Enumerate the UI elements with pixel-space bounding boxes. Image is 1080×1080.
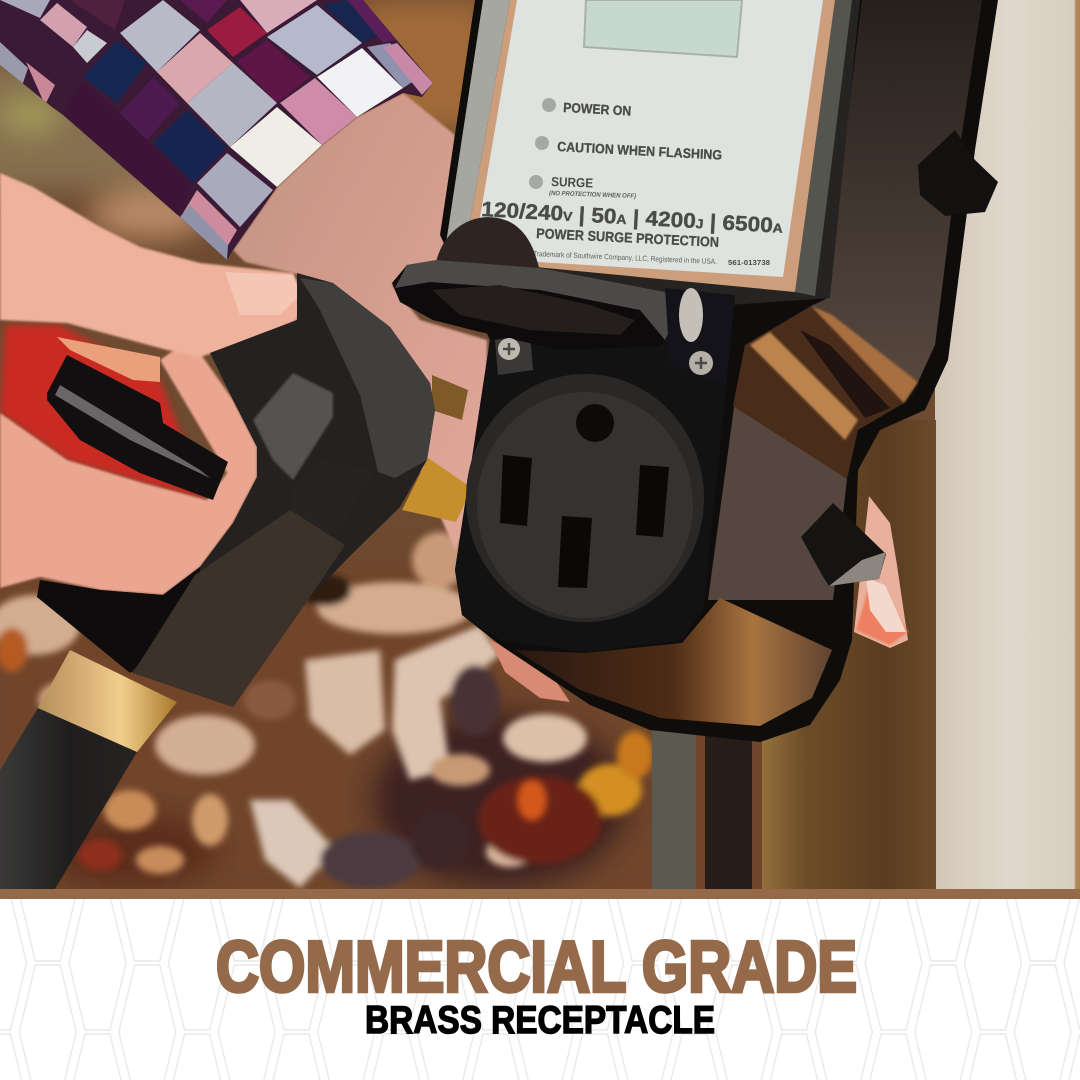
screw: right xyxy=(689,351,713,375)
white label xyxy=(473,0,823,277)
outlet face xyxy=(466,374,704,622)
subheading: BRASS RECEPTACLE xyxy=(365,999,715,1042)
headline: COMMERCIAL GRADE xyxy=(216,928,857,1008)
label: no protection: (NO PROTECTION WHEN OFF) xyxy=(549,190,636,200)
brown divider bar xyxy=(0,889,1080,899)
wooden post xyxy=(762,420,936,889)
forearm xyxy=(233,93,487,550)
screw: hinge xyxy=(679,288,703,342)
inner finger xyxy=(57,337,160,382)
plug handle latch xyxy=(47,355,228,500)
plaid shirt sleeve xyxy=(0,0,440,270)
label: surge: SURGE xyxy=(551,174,594,190)
brass collar xyxy=(38,650,177,752)
white band with honeycomb pattern xyxy=(0,899,1080,1080)
plate screw bracket xyxy=(495,335,533,375)
background: blurred ground and leaves xyxy=(0,0,935,889)
fingertips behind device xyxy=(490,496,908,702)
brass prong: upper xyxy=(432,375,468,420)
slot: bottom xyxy=(558,516,592,588)
clip: upper xyxy=(918,130,998,216)
plug grip xyxy=(253,373,333,480)
surge protector device xyxy=(392,0,998,742)
power cord xyxy=(0,650,177,889)
palm and lower fingers xyxy=(0,348,257,595)
indicator dots xyxy=(529,98,556,189)
title xyxy=(216,928,857,1042)
trademark line: Trademark of Southwire Company, LLC, Registered in the USA. xyxy=(533,249,717,266)
product name line: POWER SURGE PROTECTION xyxy=(536,225,719,250)
slot: right xyxy=(636,465,669,537)
hinge block xyxy=(665,288,735,385)
plug upper grey shell xyxy=(300,278,435,478)
metal pole: grey xyxy=(652,730,696,889)
white conduit post xyxy=(935,0,1080,889)
ratings line: 120/240 V | 50A | 4200 J | 6500 A xyxy=(481,198,784,238)
cover ring xyxy=(392,260,674,350)
tan label border xyxy=(463,0,835,292)
thumbnail xyxy=(225,272,300,315)
LCD screen xyxy=(584,0,742,57)
hinged cover xyxy=(392,217,674,350)
label: caution: CAUTION WHEN FLASHING xyxy=(557,139,722,163)
brass prong: lower xyxy=(402,458,472,522)
right housing panel xyxy=(811,0,982,382)
plug dark base xyxy=(37,567,200,673)
part number: 561-013738 xyxy=(728,260,770,267)
plug body xyxy=(37,273,472,707)
red reflection between fingers xyxy=(0,325,207,500)
plug lower shell xyxy=(133,510,345,707)
label: power on: POWER ON xyxy=(563,100,632,119)
ground hole xyxy=(576,404,614,442)
left hand xyxy=(0,173,303,595)
cover top band xyxy=(395,260,674,340)
bezel right strip xyxy=(795,0,852,296)
cover tab xyxy=(436,217,540,272)
slot: left xyxy=(500,455,532,526)
clip: lower xyxy=(801,503,886,586)
metal pole: dark xyxy=(705,730,752,889)
device outer body xyxy=(440,0,998,742)
grey bezel xyxy=(539,0,860,304)
copper reflection: upper xyxy=(733,306,918,479)
screw: left xyxy=(498,338,520,360)
thumb xyxy=(0,173,303,357)
bezel left strip xyxy=(446,0,510,239)
plug mid block xyxy=(290,460,375,550)
mirror mid panel xyxy=(708,400,847,600)
copper reflection: lower xyxy=(515,598,832,726)
black receptacle plate xyxy=(455,295,735,652)
cover inner lens xyxy=(432,285,635,335)
